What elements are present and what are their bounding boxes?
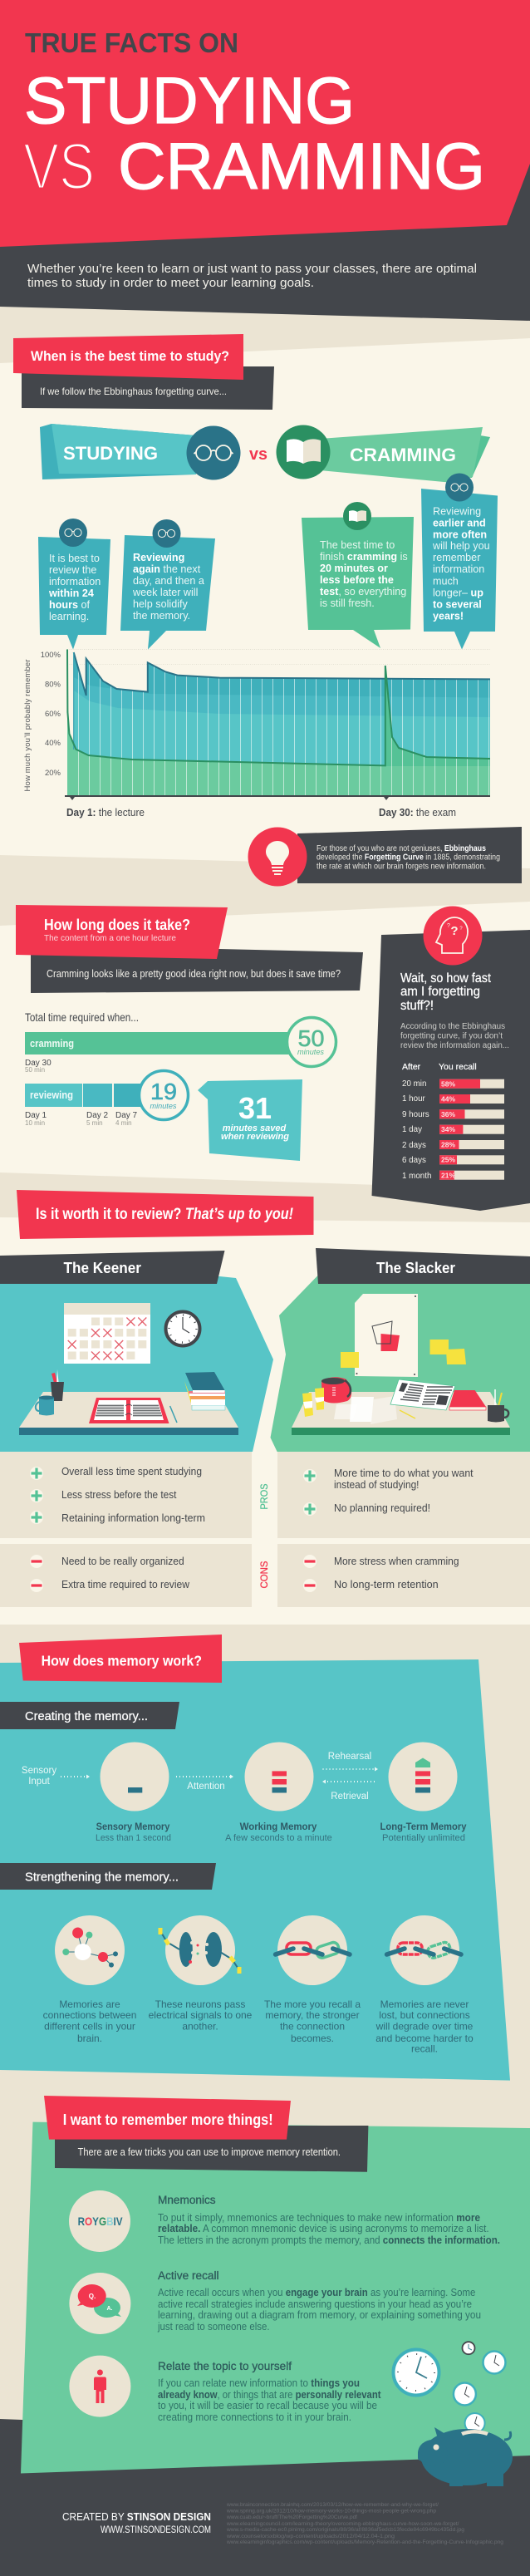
tip: active recall: Active recall occurs when you engage your brain as you’re learning. Some — [158, 2287, 475, 2298]
panel: cons right: More stress when cramming — [334, 1555, 459, 1567]
label: pros: PROS — [260, 1483, 270, 1509]
minutes saved callout — [198, 1079, 302, 1161]
tip: mnemonics — [69, 2190, 500, 2252]
tip: relate to yourself: Relate the topic to yourself — [158, 2360, 292, 2372]
reviewing bar: 4 min — [115, 1119, 132, 1127]
callout: reviewing again: week later will — [132, 587, 198, 598]
memory flow diagram: Sensory — [22, 1766, 56, 1776]
heading: remember more things: I want to remember more things! — [63, 2111, 273, 2128]
dark intro band — [0, 158, 530, 321]
reviewing bar: Day 2 — [86, 1111, 109, 1120]
sensory memory circle — [100, 1742, 169, 1812]
reviewing bar: 19 — [150, 1079, 177, 1104]
panel: pros left: Less stress before the test — [61, 1488, 177, 1501]
beige band under header — [0, 299, 530, 363]
icon: loose papers — [334, 1396, 397, 1424]
reviewing bar — [25, 1070, 188, 1127]
beige band: worth it — [0, 1172, 530, 1222]
tip: relate to yourself: If you can relate new information to things you — [158, 2377, 360, 2389]
memory captions: memory, the stronger — [265, 2009, 360, 2021]
recall table: 21% — [441, 1172, 455, 1180]
callout: reviewing again: help solidify — [133, 598, 189, 610]
panel: pros right: No planning required! — [334, 1502, 430, 1514]
section heading: when to study: When is the best time to study? — [31, 348, 229, 364]
panel: cons left: Extra time required to review — [61, 1578, 190, 1590]
cramming bar: 50 min — [25, 1066, 45, 1074]
section heading: how long does it take: Cramming looks like a pretty good idea right now, but does it save time? — [47, 967, 341, 980]
panel: the keener — [0, 1251, 273, 1452]
icon: sticky notes — [341, 1340, 466, 1368]
forgetting curve chart: Day 30: the exam — [379, 807, 456, 819]
recall table: 1 hour — [402, 1094, 426, 1104]
panel: how fast am I forgetting: According to the Ebbinghaus — [400, 1021, 505, 1031]
sources: www.spring.org.uk/2012/10/how-memory-works-10-things-most-people-get-wrong.php — [226, 2510, 437, 2515]
reviewing bar: reviewing — [30, 1089, 73, 1101]
long-term memory circle — [389, 1742, 457, 1812]
icon: paper cups — [302, 1388, 324, 1417]
memory captions: lost, but connections — [379, 2009, 470, 2021]
icon: red book — [449, 1390, 486, 1410]
callout: best time to finish cramming: finish cramming is — [320, 551, 408, 563]
memory flow diagram: Attention — [187, 1782, 225, 1792]
icon: poster with shapes — [355, 1294, 418, 1377]
memory flow diagram: A few seconds to a minute — [225, 1833, 332, 1843]
callout: reviewing earlier and more often: to several — [433, 598, 482, 610]
memory flow diagram: Input — [28, 1777, 51, 1787]
callout: reviewing again: Reviewing — [133, 552, 184, 563]
recall table: 44% — [441, 1095, 455, 1104]
studying curve line — [74, 652, 490, 696]
section heading: how long does it take — [16, 905, 363, 993]
heading: remember more things — [44, 2096, 368, 2172]
sources: www.elearninginfographics.com/wp-content/uploads/Memory-Retention-and-the-Forgetting-Curve-Infographic.png — [226, 2540, 503, 2545]
tip: active recall — [69, 2269, 481, 2334]
icon: mug with pens — [488, 1389, 508, 1423]
credits — [62, 2510, 211, 2535]
memory captions: Memories are — [59, 1998, 120, 2010]
tip: relate to yourself: already know, or things that are personally relevant — [158, 2389, 381, 2401]
callout: best time to finish cramming: The best time to — [320, 539, 395, 551]
icon: synapse — [160, 1915, 239, 1985]
memory flow diagram: Sensory Memory — [96, 1821, 170, 1832]
panel: cons left: Need to be really organized — [61, 1555, 184, 1567]
callout: review within 24 hours: learning. — [49, 611, 89, 622]
icon: coffee pot — [321, 1377, 351, 1403]
icon: ring binder — [89, 1398, 169, 1423]
icon: pen holder and mug — [36, 1369, 64, 1416]
tip: active recall: active recall strategies include answering questions in your head as you’re — [158, 2298, 472, 2310]
heading: how does memory work — [19, 1635, 222, 1683]
panel: how fast am I forgetting: forgetting curve, if you don’t — [400, 1030, 503, 1040]
sources: www.s-media-cache-ec0.pinimg.com/originals/88/36/af/8836af5edcb13fecde84c6949bc435dd.jpg — [226, 2528, 464, 2533]
subheading: creating the memory — [0, 1702, 179, 1729]
callout: review within 24 hours: review the — [49, 564, 96, 576]
callout: best time to finish cramming — [302, 502, 414, 648]
tip: mnemonics: relatable. A common mnemonic device is using acronyms to memorize a list. — [158, 2223, 489, 2234]
axis labels: 20% — [45, 769, 61, 778]
tip: active recall: Active recall — [158, 2269, 219, 2282]
callout: review within 24 hours: hours of — [49, 599, 90, 611]
sources — [226, 2503, 503, 2545]
tip: active recall: just read to someone else. — [157, 2321, 270, 2333]
slacker heading: The Slacker — [376, 1260, 455, 1276]
callout: review within 24 hours — [38, 519, 110, 650]
icon: book small — [343, 502, 371, 530]
beige band: how long — [0, 855, 530, 926]
intro paragraph: times to study in order to meet your learning goals. — [27, 276, 314, 290]
tip: relate to yourself: creating more connections to it in your brain. — [158, 2411, 351, 2423]
cramming retention area — [67, 650, 490, 796]
callout: reviewing earlier and more often: Reviewing — [433, 505, 481, 517]
icon: glasses — [186, 425, 241, 480]
panel: how fast am I forgetting: review the information again... — [400, 1040, 509, 1050]
memory captions: brain. — [77, 2033, 102, 2044]
cramming bar: minutes — [297, 1048, 325, 1056]
keener heading: The Keener — [63, 1260, 141, 1276]
icon: head with question marks: ? — [447, 923, 450, 929]
recall table: 36% — [441, 1110, 455, 1118]
icon: piggy bank — [418, 2427, 513, 2486]
minutes saved callout: 31 — [238, 1091, 272, 1125]
recall table: You recall — [439, 1062, 477, 1072]
panel: how does memory work — [0, 1635, 510, 2081]
vs label: vs — [249, 445, 267, 464]
ebbinghaus note — [248, 827, 522, 886]
icon: head with question marks: ? — [459, 927, 463, 932]
icon: clocks — [394, 2342, 505, 2433]
recall table: 6 days — [402, 1156, 426, 1165]
tip: mnemonics: Mnemonics — [158, 2194, 216, 2206]
reviewing bar: 5 min — [86, 1119, 103, 1127]
icon: head with question marks — [424, 906, 482, 966]
memory flow diagram: Working Memory — [240, 1821, 317, 1832]
icon: brain cells — [55, 1915, 125, 1985]
memory captions: connections between — [43, 2009, 136, 2021]
memory captions: Memories are never — [380, 1998, 469, 2010]
memory captions — [43, 1998, 474, 2055]
cramming curve line — [67, 650, 490, 765]
callout: review within 24 hours: It is best to — [49, 553, 100, 564]
memory captions: electrical signals to one — [149, 2009, 253, 2021]
callout: reviewing earlier and more often: earlier and — [433, 517, 486, 528]
callout: best time to finish cramming: less before the — [320, 574, 394, 586]
axis labels: 100% — [41, 651, 61, 660]
time comparison chart — [25, 1010, 336, 1161]
callout: reviewing earlier and more often: much — [433, 575, 459, 587]
studying banner: STUDYING — [63, 443, 158, 464]
icon: book — [276, 425, 331, 479]
callout: reviewing again: the memory. — [133, 610, 190, 622]
intro paragraph: Whether you’re keen to learn or just want to pass your classes, there are optimal — [27, 262, 477, 276]
axis labels — [41, 651, 61, 778]
recall table: 28% — [441, 1140, 455, 1148]
heading: remember more things: There are a few tricks you can use to improve memory retention. — [78, 2146, 341, 2158]
ebbinghaus note: developed the Forgetting Curve in 1885, demonstrating — [317, 853, 500, 863]
time comparison chart: Total time required when... — [25, 1010, 139, 1024]
recall table: 9 hours — [402, 1110, 429, 1119]
icon: desk — [19, 1392, 238, 1435]
memory captions: another. — [182, 2021, 218, 2033]
icons: plus — [30, 1467, 43, 1524]
reviewing bar: Day 1 — [25, 1111, 47, 1120]
recall table: 2 days — [402, 1141, 426, 1150]
tip: active recall: Q. — [89, 2293, 96, 2300]
callout: best time to finish cramming: test, so everything — [320, 586, 406, 597]
tip: relate to yourself: to you, it will be easier to recall because you will be — [158, 2400, 377, 2411]
memory flow diagram: Rehearsal — [328, 1752, 371, 1762]
tip: active recall: A. — [106, 2306, 113, 2312]
icon: calendar — [64, 1303, 150, 1364]
memory captions: will degrade over time — [375, 2021, 474, 2033]
panel: remember more things — [21, 2096, 530, 2486]
tip: mnemonics: ROYGBIV — [78, 2215, 123, 2228]
icon: stack of books — [184, 1372, 225, 1410]
cramming bar: Day 30 — [25, 1059, 52, 1068]
section heading: how long does it take: How long does it take? — [44, 917, 190, 933]
callout: reviewing earlier and more often: remember — [433, 552, 480, 563]
icons: minus — [303, 1555, 317, 1592]
icons: plus — [303, 1469, 317, 1516]
credits: WWW.STINSONDESIGN.COM — [101, 2525, 211, 2535]
callout: best time to finish cramming: is still fresh. — [320, 597, 375, 609]
icons: minus — [30, 1555, 43, 1592]
memory flow diagram — [22, 1742, 467, 1843]
sources: www.counselorsxblog/wp-content/uploads/2012/04/12.04-1.png — [226, 2534, 395, 2539]
icon: glasses small — [59, 519, 87, 547]
panel: how fast am I forgetting: Wait, so how fast — [400, 971, 491, 986]
recall table: 25% — [441, 1155, 455, 1163]
callout: reviewing again: again the next — [133, 563, 201, 575]
axis — [65, 795, 490, 797]
section heading: when to study: If we follow the Ebbinghaus forgetting curve... — [40, 386, 227, 397]
sources: www.elearningcouncil.com/learning-theory/overcoming-ebbinghaus-curve-how-soon-we-forget/ — [226, 2522, 459, 2527]
reviewing bar: minutes — [150, 1102, 177, 1110]
icon: open textbook — [390, 1379, 455, 1410]
panel: pros left — [0, 1452, 252, 1538]
subheading: creating the memory: Creating the memory... — [25, 1709, 148, 1723]
tip: mnemonics: The letters in the acronym prompts the memory, and connects the information. — [158, 2234, 500, 2246]
minutes saved callout: minutes saved — [223, 1123, 286, 1133]
panel: pros left: Overall less time spent studying — [61, 1465, 202, 1477]
axis labels: 60% — [45, 710, 61, 719]
memory captions: recall. — [411, 2043, 438, 2055]
subheading: strengthening the memory — [0, 1863, 216, 1890]
callout: reviewing earlier and more often: longer– up — [433, 587, 483, 598]
panel: cons left — [0, 1544, 252, 1607]
panel: cons right: No long-term retention — [334, 1578, 439, 1590]
tip: relate to yourself — [69, 2356, 381, 2423]
callout: reviewing earlier and more often — [421, 474, 498, 650]
minutes saved callout: when reviewing — [221, 1132, 289, 1142]
section heading: worth it: Is it worth it to review? That’s up to you! — [36, 1206, 293, 1223]
memory captions: These neurons pass — [155, 1998, 245, 2010]
label: cons: CONS — [260, 1561, 270, 1589]
sources: www.brainconnection.brainhq.com/2013/03/12/how-we-remember-and-why-we-forget/ — [226, 2503, 439, 2508]
callout: reviewing earlier and more often: more often — [433, 529, 487, 541]
callout: reviewing earlier and more often: years! — [433, 611, 464, 622]
panel: the slacker — [271, 1248, 530, 1452]
slacker heading — [316, 1248, 530, 1284]
ebbinghaus note: the rate at which our brain forgets new information. — [317, 863, 486, 871]
panel: pros right — [277, 1452, 530, 1538]
cramming bar: cramming — [30, 1037, 74, 1050]
cramming bar — [25, 1017, 336, 1074]
ebbinghaus note: For those of you who are not geniuses, Ebbinghaus — [317, 844, 486, 853]
studying banner — [40, 424, 241, 480]
panel: cons right — [277, 1544, 530, 1607]
sources: www.cuab.edu/~bruff/The%20Forgetting%20Curve.pdf — [226, 2515, 357, 2520]
keener heading — [0, 1251, 224, 1284]
panel: how fast am I forgetting: am I forgetting — [400, 985, 480, 999]
memory flow diagram: Long-Term Memory — [380, 1821, 467, 1832]
icon: desk — [292, 1392, 510, 1435]
memory captions: becomes. — [291, 2033, 334, 2044]
panel: pros left: Retaining information long-term — [61, 1512, 205, 1524]
icon: wall clock — [166, 1311, 199, 1346]
title line: cramming: CRAMMING — [118, 129, 485, 203]
memory captions: and become harder to — [375, 2033, 474, 2044]
recall table: 20 min — [402, 1079, 426, 1089]
callout: review within 24 hours: information — [49, 576, 101, 587]
beige lower background — [0, 1625, 530, 2456]
icon: light bulb — [248, 828, 307, 886]
axis labels: 40% — [45, 739, 61, 748]
panel: pros right: instead of studying! — [334, 1478, 419, 1491]
recall table: 1 month — [402, 1172, 431, 1181]
memory captions: different cells in your — [44, 2021, 135, 2033]
icon: glasses small — [153, 519, 181, 548]
callout: review within 24 hours: within 24 — [48, 587, 94, 599]
cramming banner: CRAMMING — [350, 445, 456, 465]
icon: strong chain — [276, 1915, 350, 1985]
day labels: Day 1: the lecture — [66, 807, 145, 819]
memory flow diagram: Potentially unlimited — [382, 1833, 465, 1843]
heading: how does memory work: How does memory work? — [42, 1653, 202, 1669]
recall table: After — [402, 1062, 421, 1072]
icon: pen — [170, 1406, 177, 1423]
section heading: how long does it take: The content from a one hour lecture — [44, 933, 176, 943]
tip: mnemonics: To put it simply, mnemonics are techniques to make new information more — [158, 2212, 480, 2224]
reviewing bar: 10 min — [25, 1119, 45, 1127]
axis labels: 80% — [45, 681, 61, 690]
recall table: 34% — [441, 1125, 455, 1133]
callout: reviewing again: day, and then a — [133, 575, 204, 587]
panel: pros right: More time to do what you want — [334, 1467, 474, 1479]
callout: reviewing again — [120, 519, 215, 650]
intro paragraph — [27, 262, 477, 290]
callout: best time to finish cramming: 20 minutes or — [320, 563, 388, 574]
title line: studying: STUDYING — [24, 63, 355, 137]
footer dark background — [0, 2419, 530, 2576]
icon: pencil — [400, 1410, 415, 1418]
callout: reviewing earlier and more often: will help you — [432, 540, 490, 552]
memory captions: the connection — [280, 2021, 345, 2033]
recall table — [402, 1062, 504, 1181]
memory flow diagram: Retrieval — [331, 1792, 369, 1802]
panel: how fast am I forgetting — [372, 906, 530, 1211]
title line: vs: VS — [23, 129, 95, 203]
section heading: worth it — [17, 1190, 314, 1239]
memory flow diagram: Less than 1 second — [96, 1833, 171, 1843]
panel: how fast am I forgetting: stuff?! — [400, 999, 434, 1013]
forgetting curve chart — [23, 649, 490, 819]
cramming banner — [276, 425, 490, 483]
credits: CREATED BY STINSON DESIGN — [62, 2510, 211, 2523]
icon: glasses small — [445, 474, 474, 502]
red title panel — [0, 0, 530, 247]
reviewing bar: Day 7 — [115, 1111, 138, 1120]
icon: degraded chain — [387, 1915, 461, 1985]
cramming bar: 50 — [297, 1025, 324, 1051]
recall table: 1 day — [402, 1125, 422, 1134]
title line: true facts on: TRUE FACTS ON — [25, 27, 238, 58]
subheading: strengthening the memory: Strengthening the memory... — [25, 1870, 179, 1885]
icon: head with question marks: ? — [450, 924, 459, 938]
studying retention area — [74, 652, 490, 796]
forgetting curve chart: How much you’ll probably remember — [23, 660, 32, 791]
tip: active recall: learning, drawing out a diagram from memory, or explaining something you — [158, 2309, 481, 2321]
working memory circle — [244, 1742, 314, 1812]
callout: reviewing earlier and more often: information — [433, 563, 484, 575]
recall table: 58% — [441, 1080, 455, 1089]
memory captions: The more you recall a — [264, 1998, 361, 2010]
section heading: when to study — [13, 334, 274, 410]
